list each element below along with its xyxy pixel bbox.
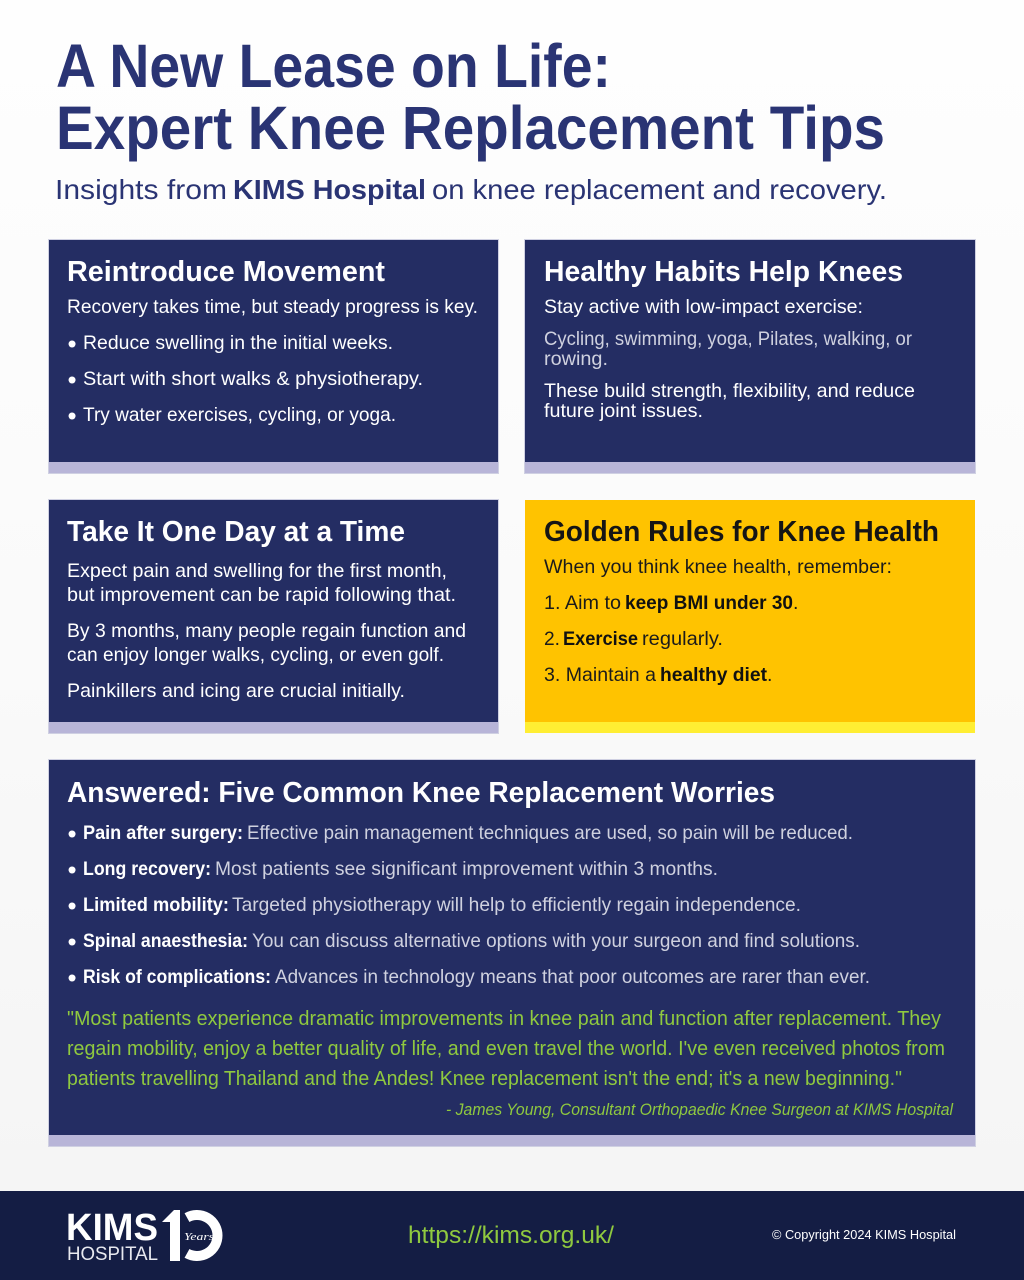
list: five worries: Most patients see significant improvement within 3 months. [215,858,718,880]
title: A New Lease on Life: [56,32,611,100]
list: five worries: Risk of complications: [83,966,271,988]
footer [0,1191,1024,1280]
text block: recovery tips: • [68,328,77,358]
list: five worries: Limited mobility: [83,894,229,916]
text block: low-impact exercise [544,296,915,422]
text block: rules list: . [793,592,798,614]
logo: KIMS Hospital 10 years [66,1207,217,1265]
text block: rules list: 3. Maintain a [544,664,656,686]
heading: golden rules: Golden Rules for Knee Health [544,516,939,548]
text block: recovery timeline: but improvement can be rapid following that. [67,584,456,606]
text block: recovery timeline: Expect pain and swelling for the first month, [67,560,447,582]
text block: rules list [544,556,892,686]
panel: reintroduce movement [48,240,498,474]
subtitle: KIMS Hospital [233,174,426,205]
list: five worries: Spinal anaesthesia: [83,930,248,952]
text block: rules list: 1. Aim to [544,592,621,614]
text block: rules list: When you think knee health, remember: [544,556,892,578]
panel: golden rules [525,500,975,733]
text block: low-impact exercise: These build strength, flexibility, and reduce [544,380,915,402]
list: five worries: • [68,854,77,884]
title: Expert Knee Replacement Tips [56,94,885,162]
quote: "Most patients experience dramatic improvements in knee pain and function after replacement. They [67,1008,941,1030]
text block: recovery timeline [67,560,466,702]
subtitle: Insights from [55,174,227,205]
text block: rules list: regularly. [642,628,723,650]
logo: KIMS Hospital 10 years: KIMS [66,1207,158,1249]
heading: common worries: Answered: Five Common Knee Replacement Worries [67,777,775,809]
quote: patients travelling Thailand and the Andes! Knee replacement isn't the end; it's a new beginning." [67,1068,902,1090]
quote attribution: - James Young, Consultant Orthopaedic Knee Surgeon at KIMS Hospital [446,1100,954,1119]
list: five worries: • [68,818,77,848]
text block: rules list: Exercise [563,628,638,650]
subtitle [55,174,887,205]
heading: reintroduce movement: Reintroduce Movement [67,256,386,288]
heading: healthy habits: Healthy Habits Help Knees [544,256,903,288]
text block: recovery tips: Recovery takes time, but steady progress is key. [67,296,478,318]
text block: recovery timeline: can enjoy longer walks, cycling, or even golf. [67,644,444,666]
text block: recovery timeline: By 3 months, many people regain function and [67,620,466,642]
text block: rules list: keep BMI under 30 [625,592,793,614]
text block: low-impact exercise: rowing. [544,348,608,370]
list: five worries: Pain after surgery: [83,822,243,844]
text block: low-impact exercise: future joint issues. [544,400,703,422]
list: five worries: Targeted physiotherapy will help to efficiently regain independence. [232,894,801,916]
text block: recovery tips [67,296,478,430]
text block: rules list: healthy diet [660,664,767,686]
link: website: https://kims.org.uk/ [408,1222,614,1249]
list: five worries: • [68,890,77,920]
text block: recovery tips: Reduce swelling in the initial weeks. [83,332,393,354]
text block: rules list: 2. [544,628,560,650]
heading: one day at a time: Take It One Day at a Time [67,516,405,548]
text block: recovery timeline: Painkillers and icing are crucial initially. [67,680,405,702]
text block: rules list: . [767,664,772,686]
logo: KIMS Hospital 10 years: HOSPITAL [67,1243,158,1265]
text block: recovery tips: • [68,400,77,430]
text block: recovery tips: Start with short walks & physiotherapy. [83,368,423,390]
text block: recovery tips: • [68,364,77,394]
copyright: © Copyright 2024 KIMS Hospital [772,1227,956,1242]
list: five worries: • [68,962,77,992]
list: five worries: • [68,926,77,956]
list: five worries: Long recovery: [83,858,211,880]
list: five worries: Advances in technology means that poor outcomes are rarer than ever. [275,966,870,988]
subtitle: on knee replacement and recovery. [432,174,887,205]
list: five worries [68,818,870,992]
text block: low-impact exercise: Cycling, swimming, yoga, Pilates, walking, or [544,328,912,350]
title [56,32,885,162]
logo: KIMS Hospital 10 years: Years [184,1231,214,1243]
text block: low-impact exercise: Stay active with low-impact exercise: [544,296,863,318]
quote [67,1008,945,1090]
panel: healthy habits [524,240,976,474]
quote: regain mobility, enjoy a better quality of life, and even travel the world. I've even received photos from [67,1038,945,1060]
panel: common worries [48,760,976,1146]
text block: recovery tips: Try water exercises, cycling, or yoga. [83,404,396,426]
list: five worries: Effective pain management techniques are used, so pain will be reduced. [247,822,853,844]
panel: one day at a time [48,500,498,734]
list: five worries: You can discuss alternative options with your surgeon and find solutions. [252,930,860,952]
